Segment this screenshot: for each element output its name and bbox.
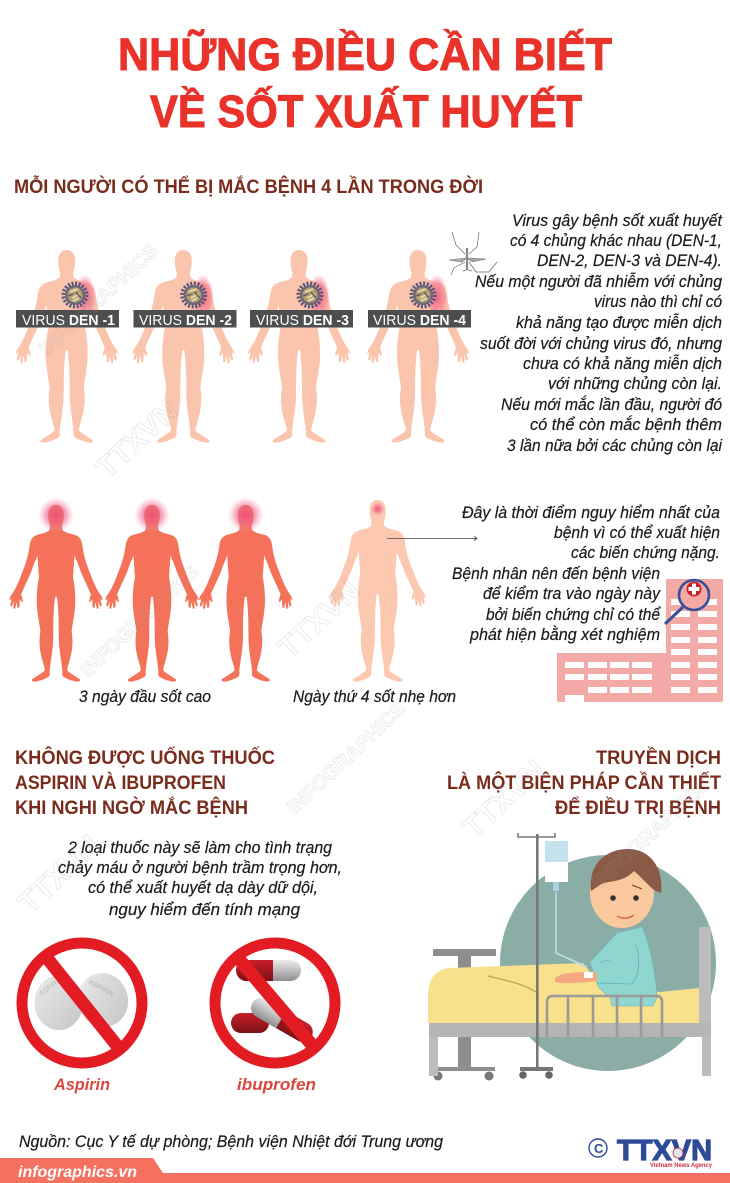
patient	[555, 849, 661, 1006]
title	[118, 29, 612, 137]
text block: drug warning	[58, 839, 342, 919]
caption: first three days: 3 ngày đầu sốt cao	[79, 688, 211, 706]
text: TTXVN	[457, 754, 552, 845]
text block: drug warning: có thể xuất huyết dạ dày dữ dội,	[88, 879, 318, 897]
text block: drug warning: nguy hiểm đến tính mạng	[109, 901, 301, 919]
text block: virus explanation: 3 lần nữa bởi các chủng còn lại	[507, 437, 723, 455]
text: TTXVN	[272, 574, 367, 665]
icon: aspirin prohibited: ASPIRIN	[87, 979, 115, 999]
heading: infusion: ĐỂ ĐIỀU TRỊ BỆNH	[555, 797, 721, 819]
footer bar: infographics.vn	[18, 1164, 137, 1181]
logo: TTXVN: C	[594, 1141, 604, 1156]
figures: high fever first three days	[9, 497, 292, 682]
text block: dangerous day	[452, 504, 720, 644]
text: TTXVN	[12, 829, 107, 920]
figure: DEN-3: VIRUS DEN -3	[256, 312, 349, 329]
logo: TTXVN: Vietnam News Agency	[650, 1162, 712, 1169]
icon: aspirin prohibited: ASPIRIN	[38, 976, 65, 998]
text block: dangerous day: các biến chứng nặng.	[571, 544, 720, 562]
figures: four virus strains	[16, 250, 471, 443]
text block: virus explanation: có thể còn mắc bệnh thêm	[530, 415, 722, 434]
footer bar	[0, 1158, 730, 1183]
logo: TTXVN: TTXVN	[617, 1135, 712, 1167]
text block: virus explanation: có 4 chủng khác nhau (DEN-1,	[510, 232, 722, 250]
text block: virus explanation: suốt đời với chủng virus đó, nhưng	[480, 335, 723, 353]
text block: drug warning: 2 loại thuốc này sẽ làm cho tình trạng	[67, 839, 333, 857]
figure: DEN-2: VIRUS DEN -2	[139, 312, 232, 329]
text block: dangerous day: Bệnh nhân nên đến bệnh viện	[452, 565, 660, 583]
heading: no aspirin: ASPIRIN VÀ IBUPROFEN	[15, 772, 226, 794]
text block: virus explanation: DEN-2, DEN-3 và DEN-4).	[537, 252, 722, 270]
heading: no aspirin: KHI NGHI NGỜ MẮC BỆNH	[15, 797, 248, 819]
text block: virus explanation	[475, 212, 723, 455]
text block: virus explanation: virus nào thì chỉ có	[594, 293, 722, 311]
figure: DEN-1: VIRUS DEN -1	[22, 312, 115, 329]
figure: DEN-2	[132, 250, 236, 443]
text block: virus explanation: với những chủng còn lại.	[548, 375, 722, 393]
text block: dangerous day: để kiểm tra vào ngày này	[483, 585, 662, 603]
bedside table	[433, 949, 496, 1080]
text block: virus explanation: Nếu một người đã nhiễm với chủng	[475, 272, 723, 291]
illustration: patient on infusion	[428, 833, 716, 1080]
bed	[428, 927, 711, 1076]
text: INFOGRAPHICS	[76, 561, 204, 682]
heading: four infections: MỖI NGƯỜI CÓ THỂ BỊ MẮC BỆNH 4 LẦN TRONG ĐỜI	[14, 176, 483, 198]
heading: no aspirin: KHÔNG ĐƯỢC UỐNG THUỐC	[15, 747, 275, 769]
drip stand and bag	[518, 833, 587, 1079]
figure: DEN-1	[16, 250, 119, 443]
text block: virus explanation: Virus gây bệnh sốt xuất huyết	[512, 212, 723, 230]
heading: infusion: TRUYỀN DỊCH	[596, 747, 721, 769]
heading: no aspirin	[15, 747, 275, 819]
figure: DEN-4: VIRUS DEN -4	[373, 312, 467, 329]
figure: DEN-4	[367, 250, 471, 443]
text block: dangerous day: bởi biến chứng chỉ có thể	[486, 606, 661, 624]
figure: DEN-3	[248, 250, 353, 443]
title: VỀ SỐT XUẤT HUYẾT	[150, 86, 582, 137]
heading: infusion: LÀ MỘT BIỆN PHÁP CẦN THIẾT	[447, 772, 721, 794]
text block: dangerous day: bệnh vì có thể xuất hiện	[554, 524, 720, 542]
text block: virus explanation: khả năng tạo được miễn dịch	[516, 313, 722, 332]
bed rail	[547, 996, 662, 1037]
arrow	[387, 536, 477, 540]
icon: hospital with magnifier	[557, 579, 723, 702]
caption: fourth day: Ngày thứ 4 sốt nhẹ hơn	[293, 688, 456, 706]
text: INFOGRAPHICS	[35, 240, 163, 361]
icon: ibuprofen prohibited	[215, 943, 335, 1063]
text: TTXVN	[90, 394, 185, 485]
heading: infusion	[447, 747, 721, 819]
text block: virus explanation: Nếu mới mắc lần đầu, người đó	[501, 395, 722, 414]
label: aspirin: Aspirin	[53, 1075, 110, 1094]
icon: aspirin prohibited	[22, 943, 142, 1063]
title: NHỮNG ĐIỀU CẦN BIẾT	[118, 29, 612, 80]
text block: dangerous day: phát hiện bằng xét nghiệm	[469, 625, 660, 644]
text: INFOGRAPHICS	[283, 698, 411, 819]
icon: mosquito	[449, 232, 497, 275]
label: ibuprofen: ibuprofen	[237, 1075, 316, 1094]
figure: fourth day	[330, 500, 426, 682]
text block: virus explanation: chưa có khả năng miễn dịch	[523, 354, 722, 373]
text: INFOGRAPHICS	[588, 773, 716, 894]
text block: drug warning: chảy máu ở người bệnh trầm trọng hơn,	[58, 859, 342, 877]
source: Nguồn: Cục Y tế dự phòng; Bệnh viện Nhiệt đới Trung ương	[19, 1133, 444, 1151]
text block: dangerous day: Đây là thời điểm nguy hiểm nhất của	[462, 504, 720, 522]
